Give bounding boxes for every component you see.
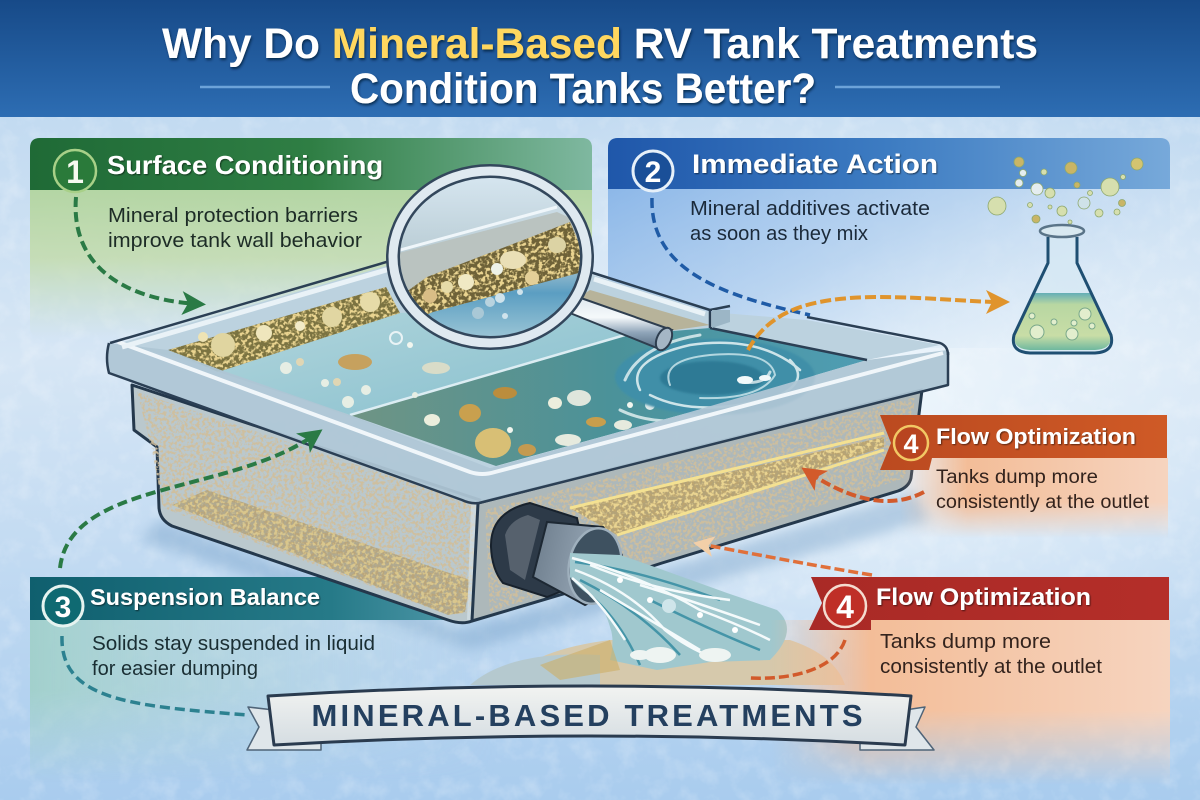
panel: suspension balance xyxy=(30,577,444,763)
tank shadow xyxy=(140,490,930,650)
back interior xyxy=(120,262,940,468)
magnified sediment xyxy=(400,206,580,319)
title: Why Do Mineral-Based RV Tank Treatments xyxy=(162,20,1038,68)
water surface left section xyxy=(218,305,625,415)
number badge 1: 1 xyxy=(66,154,84,190)
body text: improve tank wall behavior xyxy=(108,230,362,252)
body text xyxy=(936,467,1150,513)
body text: as soon as they mix xyxy=(690,223,868,245)
heading: Flow Optimization xyxy=(936,424,1136,449)
bubbles xyxy=(988,157,1143,224)
panel: surface conditioning xyxy=(30,138,592,338)
number badge 1 xyxy=(54,150,96,192)
panel: flow optimization (orange) xyxy=(880,415,1168,538)
banner xyxy=(247,686,934,750)
arrow: immediate action xyxy=(652,198,810,315)
heading: Flow Optimization xyxy=(876,584,1091,611)
left wall xyxy=(132,385,480,623)
arrow: suspension to banner xyxy=(62,636,248,715)
number badge 2: 2 xyxy=(645,156,661,189)
body text: Mineral additives activate xyxy=(690,198,930,220)
glass outline xyxy=(1013,237,1112,353)
water surface right section xyxy=(350,328,867,466)
body text: Tanks dump more xyxy=(936,467,1098,488)
body text: for easier dumping xyxy=(92,658,258,680)
number badge 2 xyxy=(633,151,673,191)
divider between tank sections xyxy=(350,335,625,415)
heading: Surface Conditioning xyxy=(107,150,383,180)
glass body xyxy=(1013,237,1112,353)
header band xyxy=(0,0,1200,117)
flask xyxy=(988,157,1143,353)
sediment clumps and bubbles in the water xyxy=(280,332,655,458)
title xyxy=(162,20,1038,113)
outlet pipe xyxy=(491,503,627,608)
body text xyxy=(880,631,1102,678)
arrow: flow optimization orange xyxy=(808,472,924,501)
body text xyxy=(690,198,930,245)
body text: consistently at the outlet xyxy=(880,656,1102,678)
handle xyxy=(570,297,675,353)
title: Condition Tanks Better? xyxy=(350,65,816,113)
ribbon xyxy=(880,415,1167,470)
arrow: vortex to flask xyxy=(748,297,1002,350)
heading: Immediate Action xyxy=(692,149,938,179)
number badge 4: 4 xyxy=(903,429,919,459)
flask lip xyxy=(1040,225,1084,237)
panel: immediate action xyxy=(608,138,1170,348)
arrow: suspension to wall xyxy=(60,434,316,568)
back rim xyxy=(110,258,948,360)
body text: consistently at the outlet xyxy=(936,492,1150,513)
number badge 4 xyxy=(824,585,866,627)
number badge 4 xyxy=(894,426,928,460)
tank xyxy=(107,258,948,623)
header bar xyxy=(608,138,1170,189)
body text: Tanks dump more xyxy=(880,631,1051,653)
lens xyxy=(398,175,582,339)
ring xyxy=(393,171,587,343)
body text: Solids stay suspended in liquid xyxy=(92,633,375,655)
water stream xyxy=(470,553,845,685)
right wall xyxy=(472,390,922,621)
arrow: flow optimization red xyxy=(750,640,845,678)
number badge 3: 3 xyxy=(55,591,71,624)
back wall sand xyxy=(560,290,710,335)
body text xyxy=(108,205,362,252)
magnifying glass xyxy=(393,171,675,353)
vortex xyxy=(615,335,815,421)
number badge 3 xyxy=(43,586,83,626)
liquid xyxy=(1015,293,1110,350)
body text xyxy=(92,633,375,680)
body text: Mineral protection barriers xyxy=(108,205,358,227)
front rim xyxy=(107,342,948,503)
header bar xyxy=(30,577,460,620)
heading: Suspension Balance xyxy=(90,584,320,610)
number badge 4: 4 xyxy=(836,589,854,625)
ribbon xyxy=(809,577,1169,630)
back wall sediment band xyxy=(168,287,400,372)
arrow: outlet pointer xyxy=(700,544,872,575)
panel: flow optimization (red) xyxy=(770,577,1170,785)
banner label: MINERAL-BASED TREATMENTS xyxy=(312,698,862,733)
arrow: surface conditioning xyxy=(76,197,198,304)
header bar xyxy=(30,138,592,190)
